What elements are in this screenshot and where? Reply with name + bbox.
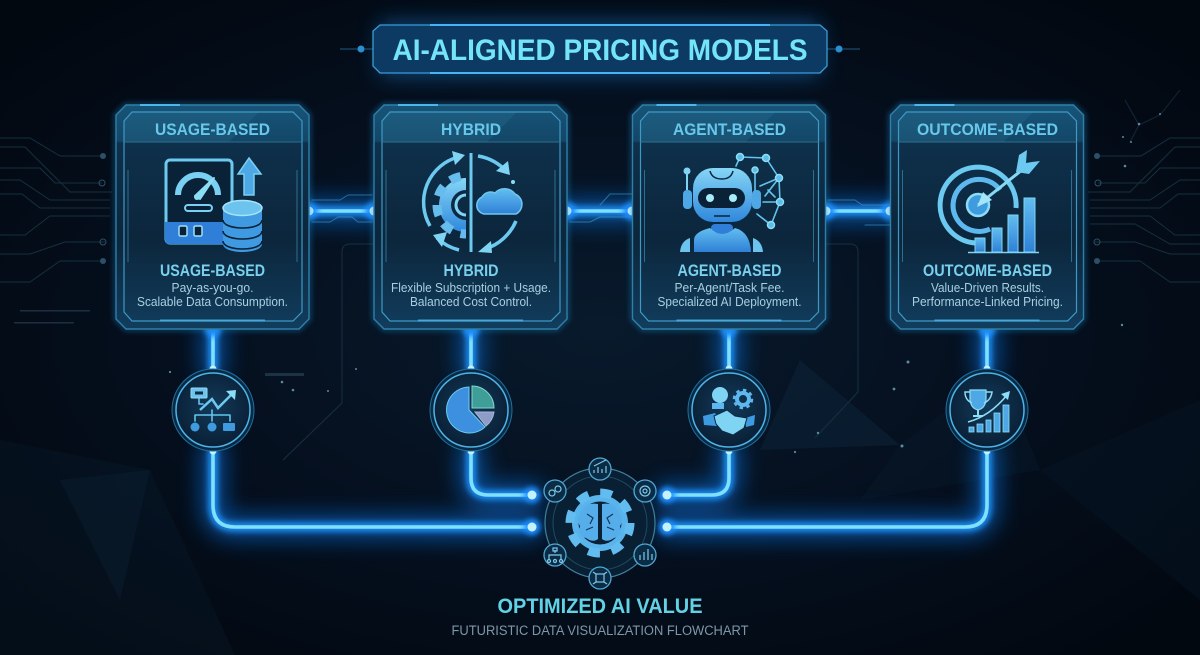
node: agent handshake circle bbox=[688, 369, 770, 451]
hub subtitle: FUTURISTIC DATA VISUALIZATION FLOWCHART bbox=[452, 623, 748, 638]
description: usage-based bbox=[137, 281, 288, 309]
icon: meter, arrow and database bbox=[165, 158, 262, 252]
satellite icons bbox=[544, 458, 656, 589]
panel: usage-based bbox=[116, 105, 309, 329]
description: agent-based bbox=[658, 281, 802, 309]
icon: robot, gear and handshake bbox=[703, 387, 755, 435]
icon: chart and hierarchy bbox=[190, 388, 236, 432]
heading: agent-based: AGENT-BASED bbox=[673, 120, 786, 139]
panel: agent-based bbox=[632, 105, 826, 329]
description: hybrid bbox=[391, 281, 551, 309]
description: outcome-based: Value-Driven Results. bbox=[931, 281, 1044, 295]
title text: AI-ALIGNED PRICING MODELS bbox=[392, 34, 808, 67]
description: agent-based: Specialized AI Deployment. bbox=[658, 295, 802, 309]
subtitle: usage-based: USAGE-BASED bbox=[160, 262, 265, 280]
icon: gear and cloud cycle bbox=[424, 151, 522, 253]
heading: usage-based: USAGE-BASED bbox=[155, 120, 270, 139]
title banner bbox=[340, 22, 860, 76]
description: hybrid: Balanced Cost Control. bbox=[410, 295, 532, 309]
icon: target with arrow and bars bbox=[940, 150, 1040, 252]
icon: trophy and bars bbox=[965, 390, 1010, 432]
panel: hybrid bbox=[374, 105, 567, 329]
description: usage-based: Pay-as-you-go. bbox=[172, 281, 254, 295]
hub: optimized AI value bbox=[544, 458, 656, 589]
heading: outcome-based: OUTCOME-BASED bbox=[917, 120, 1058, 139]
node: pie chart circle bbox=[430, 369, 512, 451]
icon: robot with network bbox=[680, 154, 784, 252]
description: usage-based: Scalable Data Consumption. bbox=[137, 295, 288, 309]
description: outcome-based: Performance-Linked Pricing. bbox=[912, 295, 1063, 309]
connector wires bbox=[205, 194, 995, 535]
node: trophy growth circle bbox=[946, 369, 1028, 451]
description: agent-based: Per-Agent/Task Fee. bbox=[674, 281, 784, 295]
subtitle: agent-based: AGENT-BASED bbox=[678, 262, 782, 280]
description: hybrid: Flexible Subscription + Usage. bbox=[391, 281, 551, 295]
node: flow chart circle bbox=[172, 369, 254, 451]
icon: gear with brain bbox=[570, 493, 630, 553]
subtitle: hybrid: HYBRID bbox=[444, 262, 499, 280]
description: outcome-based bbox=[912, 281, 1063, 309]
icon: pie chart bbox=[447, 386, 494, 433]
panel: outcome-based bbox=[890, 105, 1084, 329]
heading: hybrid: HYBRID bbox=[441, 120, 501, 139]
hub title: OPTIMIZED AI VALUE bbox=[498, 595, 702, 618]
subtitle: outcome-based: OUTCOME-BASED bbox=[923, 262, 1052, 280]
